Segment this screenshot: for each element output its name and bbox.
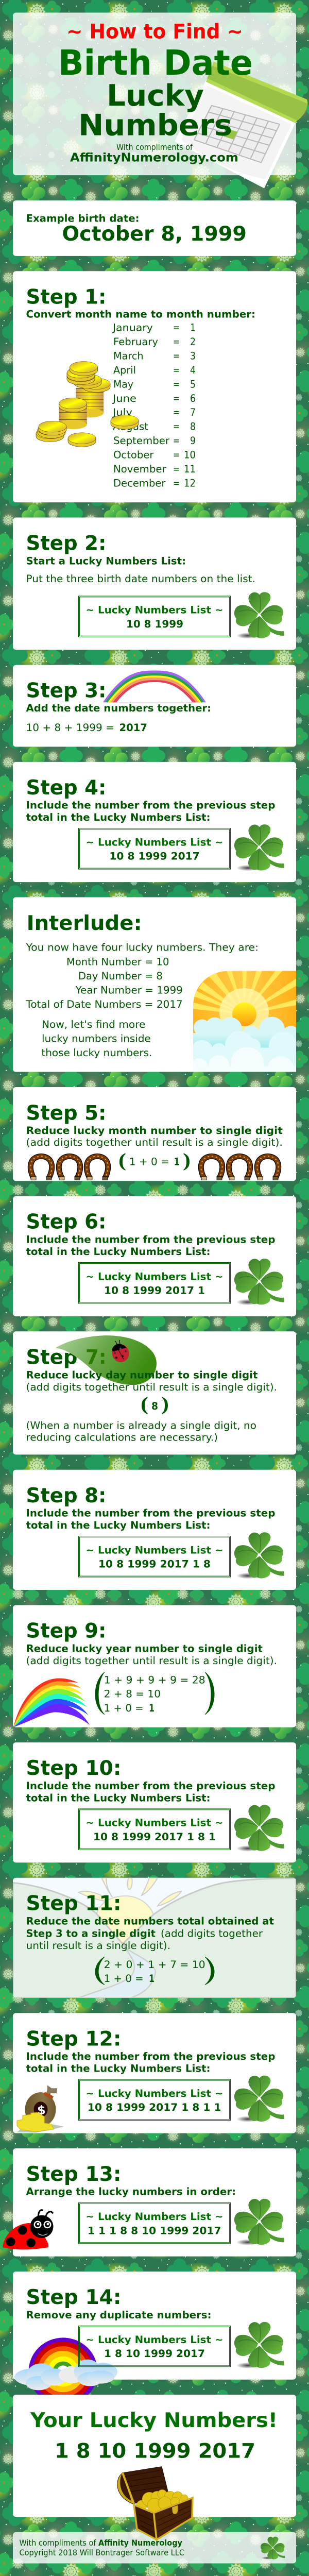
panel: step 8 <box>13 1470 296 1590</box>
panel: step 13 <box>3 2148 296 2257</box>
step 10 heading: Step 10: <box>26 1756 122 1780</box>
step 11 calculation: 2 + 0 + 1 + 7 = 10 <box>104 1959 205 1971</box>
icon: small clover <box>261 2537 285 2560</box>
step 5 calculation: ) <box>183 1149 191 1171</box>
lucky numbers list box <box>78 2326 231 2367</box>
icon: cartoon ladybug <box>3 2210 54 2249</box>
step 7 note: (When a number is already a single digit, no <box>26 1420 256 1431</box>
step 7 instruction <box>26 1369 277 1393</box>
month number table: 12 <box>184 478 196 489</box>
horseshoes left <box>30 1156 108 1180</box>
lucky numbers list box: ~ Lucky Numbers List ~ <box>85 2088 224 2099</box>
step 7 calculation: ( <box>141 1393 148 1415</box>
icon: four-leaf clover <box>234 2199 284 2245</box>
step 9 heading: Step 9: <box>26 1619 106 1642</box>
month number table: June <box>112 393 136 404</box>
icon: curved rainbow <box>13 1679 90 1727</box>
final numbers: 1 8 10 1999 2017 <box>55 2439 255 2463</box>
step 5 instruction: (add digits together until result is a single digit). <box>26 1137 283 1148</box>
step 14 heading: Step 14: <box>26 2285 122 2309</box>
panel: step 4 <box>13 762 296 882</box>
panel: step 10 <box>13 1742 296 1862</box>
step 12 heading: Step 12: <box>26 2027 122 2050</box>
site name: AffinityNumerology.com <box>70 150 238 165</box>
footer copyright: Copyright 2018 Will Bontrager Software LLC <box>19 2548 184 2557</box>
month number table: November <box>113 463 166 475</box>
interlude closing note: those lucky numbers. <box>41 1047 152 1059</box>
step 5 instruction: Reduce lucky month number to single digit <box>26 1125 283 1137</box>
lucky numbers list box <box>78 2079 231 2121</box>
lucky numbers list box: 10 8 1999 2017 1 8 1 <box>93 1831 216 1843</box>
interlude heading: Interlude: <box>27 911 142 935</box>
step 9 calculation: 2 + 8 = 10 <box>104 1688 161 1700</box>
step 7 heading: Step <box>26 1346 78 1369</box>
icon: green leaf <box>55 1335 157 1385</box>
month number table: 2 <box>190 336 196 348</box>
credit line: With compliments of <box>116 142 193 152</box>
icon: four-leaf clover <box>234 2322 284 2368</box>
panel: step 12 <box>13 2013 296 2133</box>
step 3 sum: 10 + 8 + 1999 = <box>26 722 114 734</box>
lucky numbers list box: 10 8 1999 <box>126 618 183 630</box>
icon: four-leaf clover <box>234 1259 284 1305</box>
lucky numbers list box: ~ Lucky Numbers List ~ <box>85 1817 224 1829</box>
panel: step 14 <box>13 2272 296 2405</box>
lucky numbers list box: 10 8 1999 2017 1 8 1 1 <box>88 2102 221 2113</box>
lucky numbers list box: 10 8 1999 2017 1 8 <box>98 1558 211 1570</box>
lucky numbers list box: 10 8 1999 2017 1 <box>104 1285 205 1296</box>
step 6 subtitle: total in the Lucky Numbers List: <box>26 1246 210 1258</box>
step 1 subtitle: Convert month name to month number: <box>26 309 255 320</box>
step 2 instruction: Put the three birth date numbers on the list. <box>26 573 255 585</box>
title line: numbers: Numbers <box>78 108 232 143</box>
step 10 subtitle <box>26 1780 275 1804</box>
step 5 calculation: 1 <box>174 1156 180 1168</box>
month number table: 10 <box>184 449 196 461</box>
step 7 note <box>26 1420 256 1443</box>
step 5 calculation: 1 + 0 = <box>129 1156 169 1168</box>
step 6 heading: Step 6: <box>26 1210 106 1234</box>
step 12 subtitle: total in the Lucky Numbers List: <box>26 2063 210 2075</box>
step 1 heading: Step 1: <box>26 285 106 309</box>
month number table: = <box>173 406 180 418</box>
title line: how to find: ~ How to Find ~ <box>66 20 243 43</box>
month number table: April <box>113 364 136 376</box>
step 2 heading: Step 2: <box>26 532 106 555</box>
icon: tilted calendar <box>175 62 307 189</box>
month number table: = <box>173 478 180 489</box>
step 9 calculation: 1 <box>149 1702 154 1714</box>
month number table: 1 <box>191 322 195 334</box>
month number table: July <box>112 406 132 418</box>
step 13 heading: Step 13: <box>26 2162 122 2186</box>
month number table: = <box>173 336 180 348</box>
panel: step 6 <box>13 1196 296 1316</box>
lucky numbers list box <box>78 828 231 869</box>
lucky numbers list box: 1 8 10 1999 2017 <box>104 2348 205 2360</box>
step 7 number: 7: <box>85 1346 107 1369</box>
step 10 subtitle: total in the Lucky Numbers List: <box>26 1792 210 1804</box>
interlude intro: You now have four lucky numbers. They are: <box>25 942 259 954</box>
interlude number summary: Day Number = 8 <box>78 970 163 982</box>
month number table: = <box>173 364 180 376</box>
month number table: = <box>173 435 180 447</box>
month number table: 5 <box>190 379 196 390</box>
step 11 instruction: (add digits together <box>161 1927 263 1939</box>
month number table: 11 <box>184 463 196 475</box>
interlude number summary: Year Number = 1999 <box>75 985 183 996</box>
lucky numbers list box <box>78 2202 231 2244</box>
month number table <box>112 322 196 489</box>
footer credit: Affinity Numerology <box>98 2538 183 2548</box>
interlude number summary: Month Number = 10 <box>66 956 169 968</box>
step 12 subtitle <box>26 2050 275 2075</box>
pale landscape backdrop <box>13 1878 296 1998</box>
icon: gold coin stacks <box>36 362 139 447</box>
month number table: 8 <box>190 421 196 433</box>
title line: lucky: Lucky <box>107 78 204 113</box>
step 3 subtitle: Add the date numbers together: <box>26 702 211 714</box>
icon: money bag with gold: $ <box>37 2103 46 2117</box>
icon: treasure chest <box>117 2467 193 2539</box>
step 11 instruction: until result is a single digit). <box>26 1940 170 1952</box>
lucky numbers list box <box>78 1536 231 1577</box>
title line: birth date: Birth Date <box>58 43 253 83</box>
month number table: = <box>173 322 180 334</box>
step 11 instruction: Reduce the date numbers total obtained at <box>26 1916 274 1927</box>
month number table: = <box>173 393 180 404</box>
final heading: Your Lucky Numbers! <box>30 2409 278 2432</box>
icon: four-leaf clover <box>234 824 284 871</box>
step 7 instruction: (add digits together until result is a single digit). <box>26 1381 277 1393</box>
lucky numbers list box <box>78 1809 231 1850</box>
icon: rainbow and clouds <box>14 2337 117 2405</box>
step 11 instruction: Step 3 to a single digit <box>26 1927 156 1939</box>
step 9 calculation: 1 + 0 = <box>104 1702 144 1714</box>
interlude closing note <box>41 1019 152 1059</box>
step 8 subtitle: Include the number from the previous step <box>26 1507 276 1519</box>
panel: step 7 <box>13 1331 296 1454</box>
step 7 instruction: Reduce lucky day number to single digit <box>26 1369 258 1381</box>
step 9 instruction: (add digits together until result is a single digit). <box>26 1655 277 1667</box>
step 9 calculation: 1 + 9 + 9 + 9 = 28 <box>104 1674 205 1686</box>
month number table: October <box>113 449 154 461</box>
lucky numbers list box: 1 1 1 8 8 10 1999 2017 <box>88 2225 221 2236</box>
step 7 calculation: ) <box>161 1393 169 1415</box>
step 7 note: reducing calculations are necessary.) <box>26 1431 218 1443</box>
month number table: = <box>173 350 180 362</box>
panel: step 2 <box>13 518 296 650</box>
icon: rainbow arc <box>103 670 206 702</box>
lucky numbers list box: ~ Lucky Numbers List ~ <box>85 604 224 616</box>
interlude closing note: Now, let's find more <box>42 1019 145 1030</box>
panel: your lucky numbers <box>13 2395 296 2539</box>
step 2 subtitle: Start a Lucky Numbers List: <box>26 555 186 567</box>
panel: header <box>13 13 307 189</box>
icon: ladybug on leaf <box>110 1340 131 1364</box>
icon: four-leaf clover <box>234 1805 284 1852</box>
lucky numbers list box: ~ Lucky Numbers List ~ <box>85 1271 224 1282</box>
footer credit: With compliments of <box>19 2538 96 2548</box>
horseshoes right <box>201 1156 279 1180</box>
month number table: = <box>173 421 180 433</box>
step 11 calculation <box>95 1957 214 1985</box>
interlude closing note: lucky numbers inside <box>42 1033 151 1045</box>
step 9 instruction: Reduce lucky year number to single digit <box>26 1642 263 1654</box>
step 6 subtitle <box>26 1234 275 1258</box>
month number table: December <box>113 478 166 489</box>
month number table: 4 <box>190 364 196 376</box>
month number table: 6 <box>190 393 196 404</box>
month number table: 9 <box>190 435 196 447</box>
lucky numbers list box: 10 8 1999 2017 <box>109 851 200 862</box>
step 8 subtitle: total in the Lucky Numbers List: <box>26 1519 210 1531</box>
lucky numbers list box: ~ Lucky Numbers List ~ <box>85 1545 224 1556</box>
example date: October 8, 1999 <box>62 223 247 246</box>
step 5 heading: Step 5: <box>26 1101 106 1125</box>
month number table: February <box>113 336 158 348</box>
panel: footer <box>13 2532 296 2564</box>
month number table: 7 <box>190 406 196 418</box>
lucky numbers list box <box>78 1263 231 1303</box>
month number table: January <box>112 322 153 334</box>
step 12 subtitle: Include the number from the previous step <box>26 2050 276 2062</box>
example label: Example birth date: <box>26 213 140 224</box>
step 9 calculation <box>95 1672 214 1715</box>
step 7 calculation <box>141 1393 169 1415</box>
interlude number summary: Total of Date Numbers = 2017 <box>25 998 183 1010</box>
lucky numbers list box: ~ Lucky Numbers List ~ <box>85 2334 224 2346</box>
step 11 calculation: 1 + 0 = <box>104 1973 144 1985</box>
step 5 instruction <box>26 1125 283 1148</box>
lucky numbers list box: ~ Lucky Numbers List ~ <box>85 837 224 848</box>
step 11 heading: Step 11: <box>26 1892 122 1916</box>
step 3 heading: Step 3: <box>26 679 106 702</box>
month number table: = <box>173 449 180 461</box>
icon: sun over clouds <box>193 971 296 1072</box>
panel: step 1 <box>13 271 296 502</box>
step 11 instruction <box>26 1916 274 1952</box>
step 5 calculation <box>118 1149 191 1171</box>
panel: step 9 <box>13 1605 296 1727</box>
step 7 calculation: 8 <box>151 1400 158 1412</box>
panel: example birth date <box>13 200 296 256</box>
step 11 calculation: 1 <box>149 1973 154 1985</box>
step 8 subtitle <box>26 1507 275 1531</box>
month number table: August <box>113 421 148 433</box>
step 4 subtitle: Include the number from the previous step <box>26 800 276 811</box>
step 14 subtitle: Remove any duplicate numbers: <box>26 2309 211 2321</box>
month number table: September <box>113 435 170 447</box>
month number table: May <box>113 379 133 390</box>
panel: step 5 <box>13 1087 296 1181</box>
panel: step 3 <box>13 665 296 747</box>
month number table: 3 <box>190 350 196 362</box>
step 4 subtitle <box>26 800 275 823</box>
month number table: = <box>173 379 180 390</box>
icon: money bag with gold <box>16 2085 64 2133</box>
step 3 sum: 2017 <box>119 722 147 734</box>
step 5 calculation: ( <box>118 1149 126 1171</box>
panel: interlude <box>13 897 300 1082</box>
step 4 subtitle: total in the Lucky Numbers List: <box>26 811 210 823</box>
icon: four-leaf clover <box>234 2076 284 2122</box>
step 8 heading: Step 8: <box>26 1484 106 1507</box>
lucky numbers list box: ~ Lucky Numbers List ~ <box>85 2211 224 2223</box>
interlude number summary <box>25 956 183 1010</box>
step 6 subtitle: Include the number from the previous step <box>26 1234 276 1245</box>
panel: step 11 <box>13 1878 296 1998</box>
step 9 instruction <box>26 1642 277 1667</box>
lucky numbers list box <box>78 596 231 637</box>
month number table: = <box>173 463 180 475</box>
step 10 subtitle: Include the number from the previous step <box>26 1780 276 1792</box>
step 4 heading: Step 4: <box>26 776 106 800</box>
month number table: March <box>113 350 144 362</box>
icon: four-leaf clover <box>234 592 284 639</box>
footer credit <box>19 2538 183 2548</box>
step 13 subtitle: Arrange the lucky numbers in order: <box>26 2186 236 2197</box>
icon: four-leaf clover <box>234 1532 284 1579</box>
